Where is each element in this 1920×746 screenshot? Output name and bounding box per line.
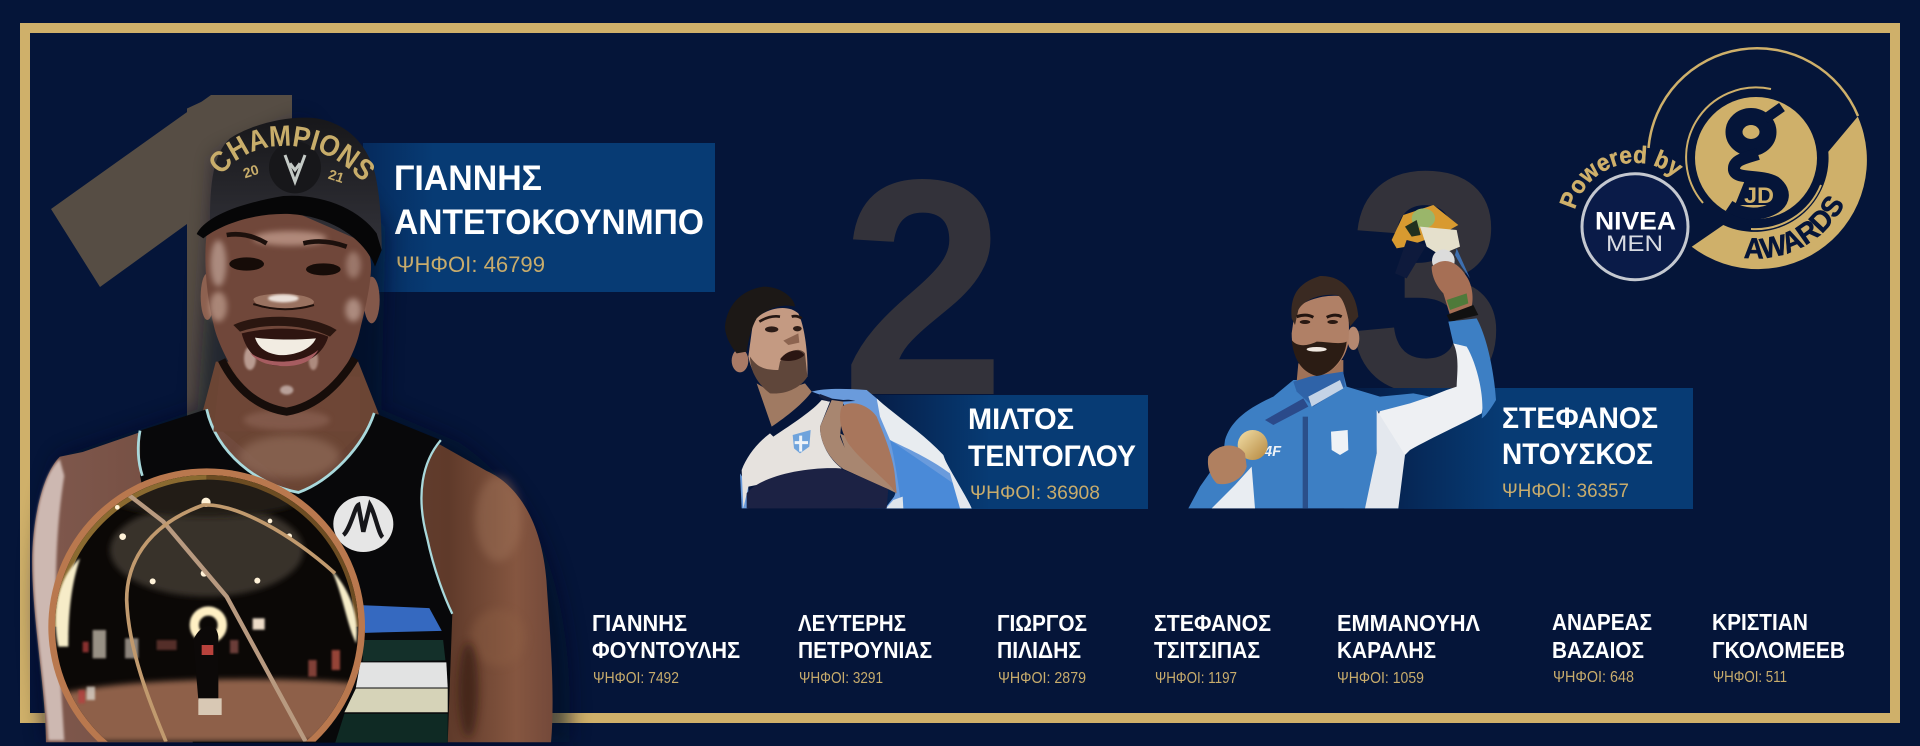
list: other nominees bbox=[592, 609, 1845, 687]
logo gold disc bbox=[1695, 97, 1817, 219]
nominee 5: ΛΕΥΤΕΡΗΣ bbox=[798, 610, 906, 636]
nominee 8 bbox=[1337, 610, 1481, 687]
photo: Douskos: 4F bbox=[1263, 444, 1282, 460]
sponsor badge: NIVEA bbox=[1595, 208, 1676, 236]
neck bbox=[213, 370, 360, 432]
nominee 4: ΦΟΥΝΤΟΥΛΗΣ bbox=[592, 637, 740, 663]
nominee 9: ΨΗΦΟΙ: 648 bbox=[1553, 669, 1634, 686]
powered by label bbox=[1575, 163, 1692, 210]
panel: second place name: ΜΙΛΤΟΣ bbox=[968, 403, 1074, 436]
logo letter mark bbox=[1729, 107, 1783, 214]
panel: winner name: ΓΙΑΝΝΗΣ bbox=[394, 159, 542, 198]
face bbox=[201, 210, 380, 415]
panel: second place name bbox=[860, 395, 1148, 509]
nominee 8: ΨΗΦΟΙ: 1059 bbox=[1337, 670, 1424, 687]
cap: 21 bbox=[326, 166, 346, 186]
logo inner arcs bbox=[1686, 87, 1771, 203]
sponsor badge bbox=[1582, 174, 1688, 280]
logo outer arc bbox=[1648, 48, 1858, 148]
panel: third place name bbox=[1344, 388, 1693, 509]
nominee 4: ΓΙΑΝΝΗΣ bbox=[592, 610, 687, 636]
nominee 4: ΨΗΦΟΙ: 7492 bbox=[593, 670, 679, 687]
nominee 4 bbox=[592, 610, 740, 687]
nominee 9: ΒΑΖΑΙΟΣ bbox=[1552, 637, 1644, 663]
nominee 6: ΓΙΩΡΓΟΣ bbox=[997, 610, 1087, 636]
nominee 7 bbox=[1154, 610, 1271, 687]
nominee 10: ΚΡΙΣΤΙΑΝ bbox=[1712, 609, 1808, 635]
nominee 6: ΨΗΦΟΙ: 2879 bbox=[998, 670, 1086, 687]
panel: second place name: ΤΕΝΤΟΓΛΟΥ bbox=[968, 440, 1136, 473]
nominee 10 bbox=[1712, 609, 1845, 686]
nominee 5: ΠΕΤΡΟΥΝΙΑΣ bbox=[798, 637, 932, 663]
panel: winner name: ΨΗΦΟΙ: 46799 bbox=[396, 252, 545, 277]
logo gold band bbox=[1692, 116, 1867, 269]
cap: 20 bbox=[241, 161, 261, 181]
panel: winner name bbox=[363, 143, 715, 292]
logo: GQ awards bbox=[1559, 47, 1867, 282]
cap: CHAMPIONS bbox=[210, 125, 374, 180]
bouquet bbox=[1392, 205, 1470, 278]
photo: Tentoglou bbox=[725, 287, 972, 508]
panel: third place name: ΨΗΦΟΙ: 36357 bbox=[1502, 481, 1629, 502]
nominee 5 bbox=[798, 610, 932, 687]
nominee 7: ΣΤΕΦΑΝΟΣ bbox=[1154, 610, 1271, 636]
nominee 6: ΠΙΛΙΔΗΣ bbox=[997, 637, 1081, 663]
nominee 5: ΨΗΦΟΙ: 3291 bbox=[799, 670, 883, 687]
jersey bbox=[138, 409, 452, 743]
panel: third place name: ΝΤΟΥΣΚΟΣ bbox=[1502, 438, 1653, 471]
photo: Antetokounmpo with trophy bbox=[31, 118, 553, 743]
jacket crest bbox=[1331, 430, 1348, 455]
nominee 9: ΑΝΔΡΕΑΣ bbox=[1552, 609, 1652, 635]
logo awards label bbox=[1744, 201, 1846, 258]
cap bbox=[196, 118, 382, 266]
rank number 1: 1 bbox=[22, 0, 439, 584]
sponsor badge: MEN bbox=[1606, 231, 1663, 256]
panel: third place name: ΣΤΕΦΑΝΟΣ bbox=[1502, 402, 1658, 435]
figure shadow bbox=[37, 119, 570, 742]
logo letter mark: JD bbox=[1744, 183, 1774, 208]
nominee 8: ΕΜΜΑΝΟΥΗΛ bbox=[1337, 610, 1481, 636]
rank number 3: 3 bbox=[1348, 105, 1507, 457]
nominee 10: ΨΗΦΟΙ: 511 bbox=[1713, 669, 1787, 686]
nominee 6 bbox=[997, 610, 1087, 687]
nominee 10: ΓΚΟΛΟΜΕΕΒ bbox=[1712, 637, 1845, 663]
logo: GQ awards: AWARDS bbox=[1744, 196, 1843, 259]
logo: GQ awards: Powered by bbox=[1559, 146, 1683, 209]
jersey sponsor logo bbox=[333, 496, 393, 552]
panel: second place name: ΨΗΦΟΙ: 36908 bbox=[970, 483, 1100, 504]
torso bbox=[32, 362, 553, 743]
medal bbox=[1238, 430, 1268, 460]
singlet crest bbox=[793, 430, 811, 453]
nominee 7: ΨΗΦΟΙ: 1197 bbox=[1155, 670, 1237, 687]
photo: Douskos bbox=[1188, 205, 1496, 508]
panel: winner name: ΑΝΤΕΤΟΚΟΥΝΜΠΟ bbox=[394, 203, 704, 242]
trophy bbox=[48, 468, 365, 742]
rank number 2: 2 bbox=[841, 115, 1005, 459]
nominee 7: ΤΣΙΤΣΙΠΑΣ bbox=[1154, 637, 1260, 663]
nominee 8: ΚΑΡΑΛΗΣ bbox=[1337, 637, 1436, 663]
nominee 9 bbox=[1552, 609, 1652, 686]
rank number 1 bbox=[51, 95, 292, 416]
